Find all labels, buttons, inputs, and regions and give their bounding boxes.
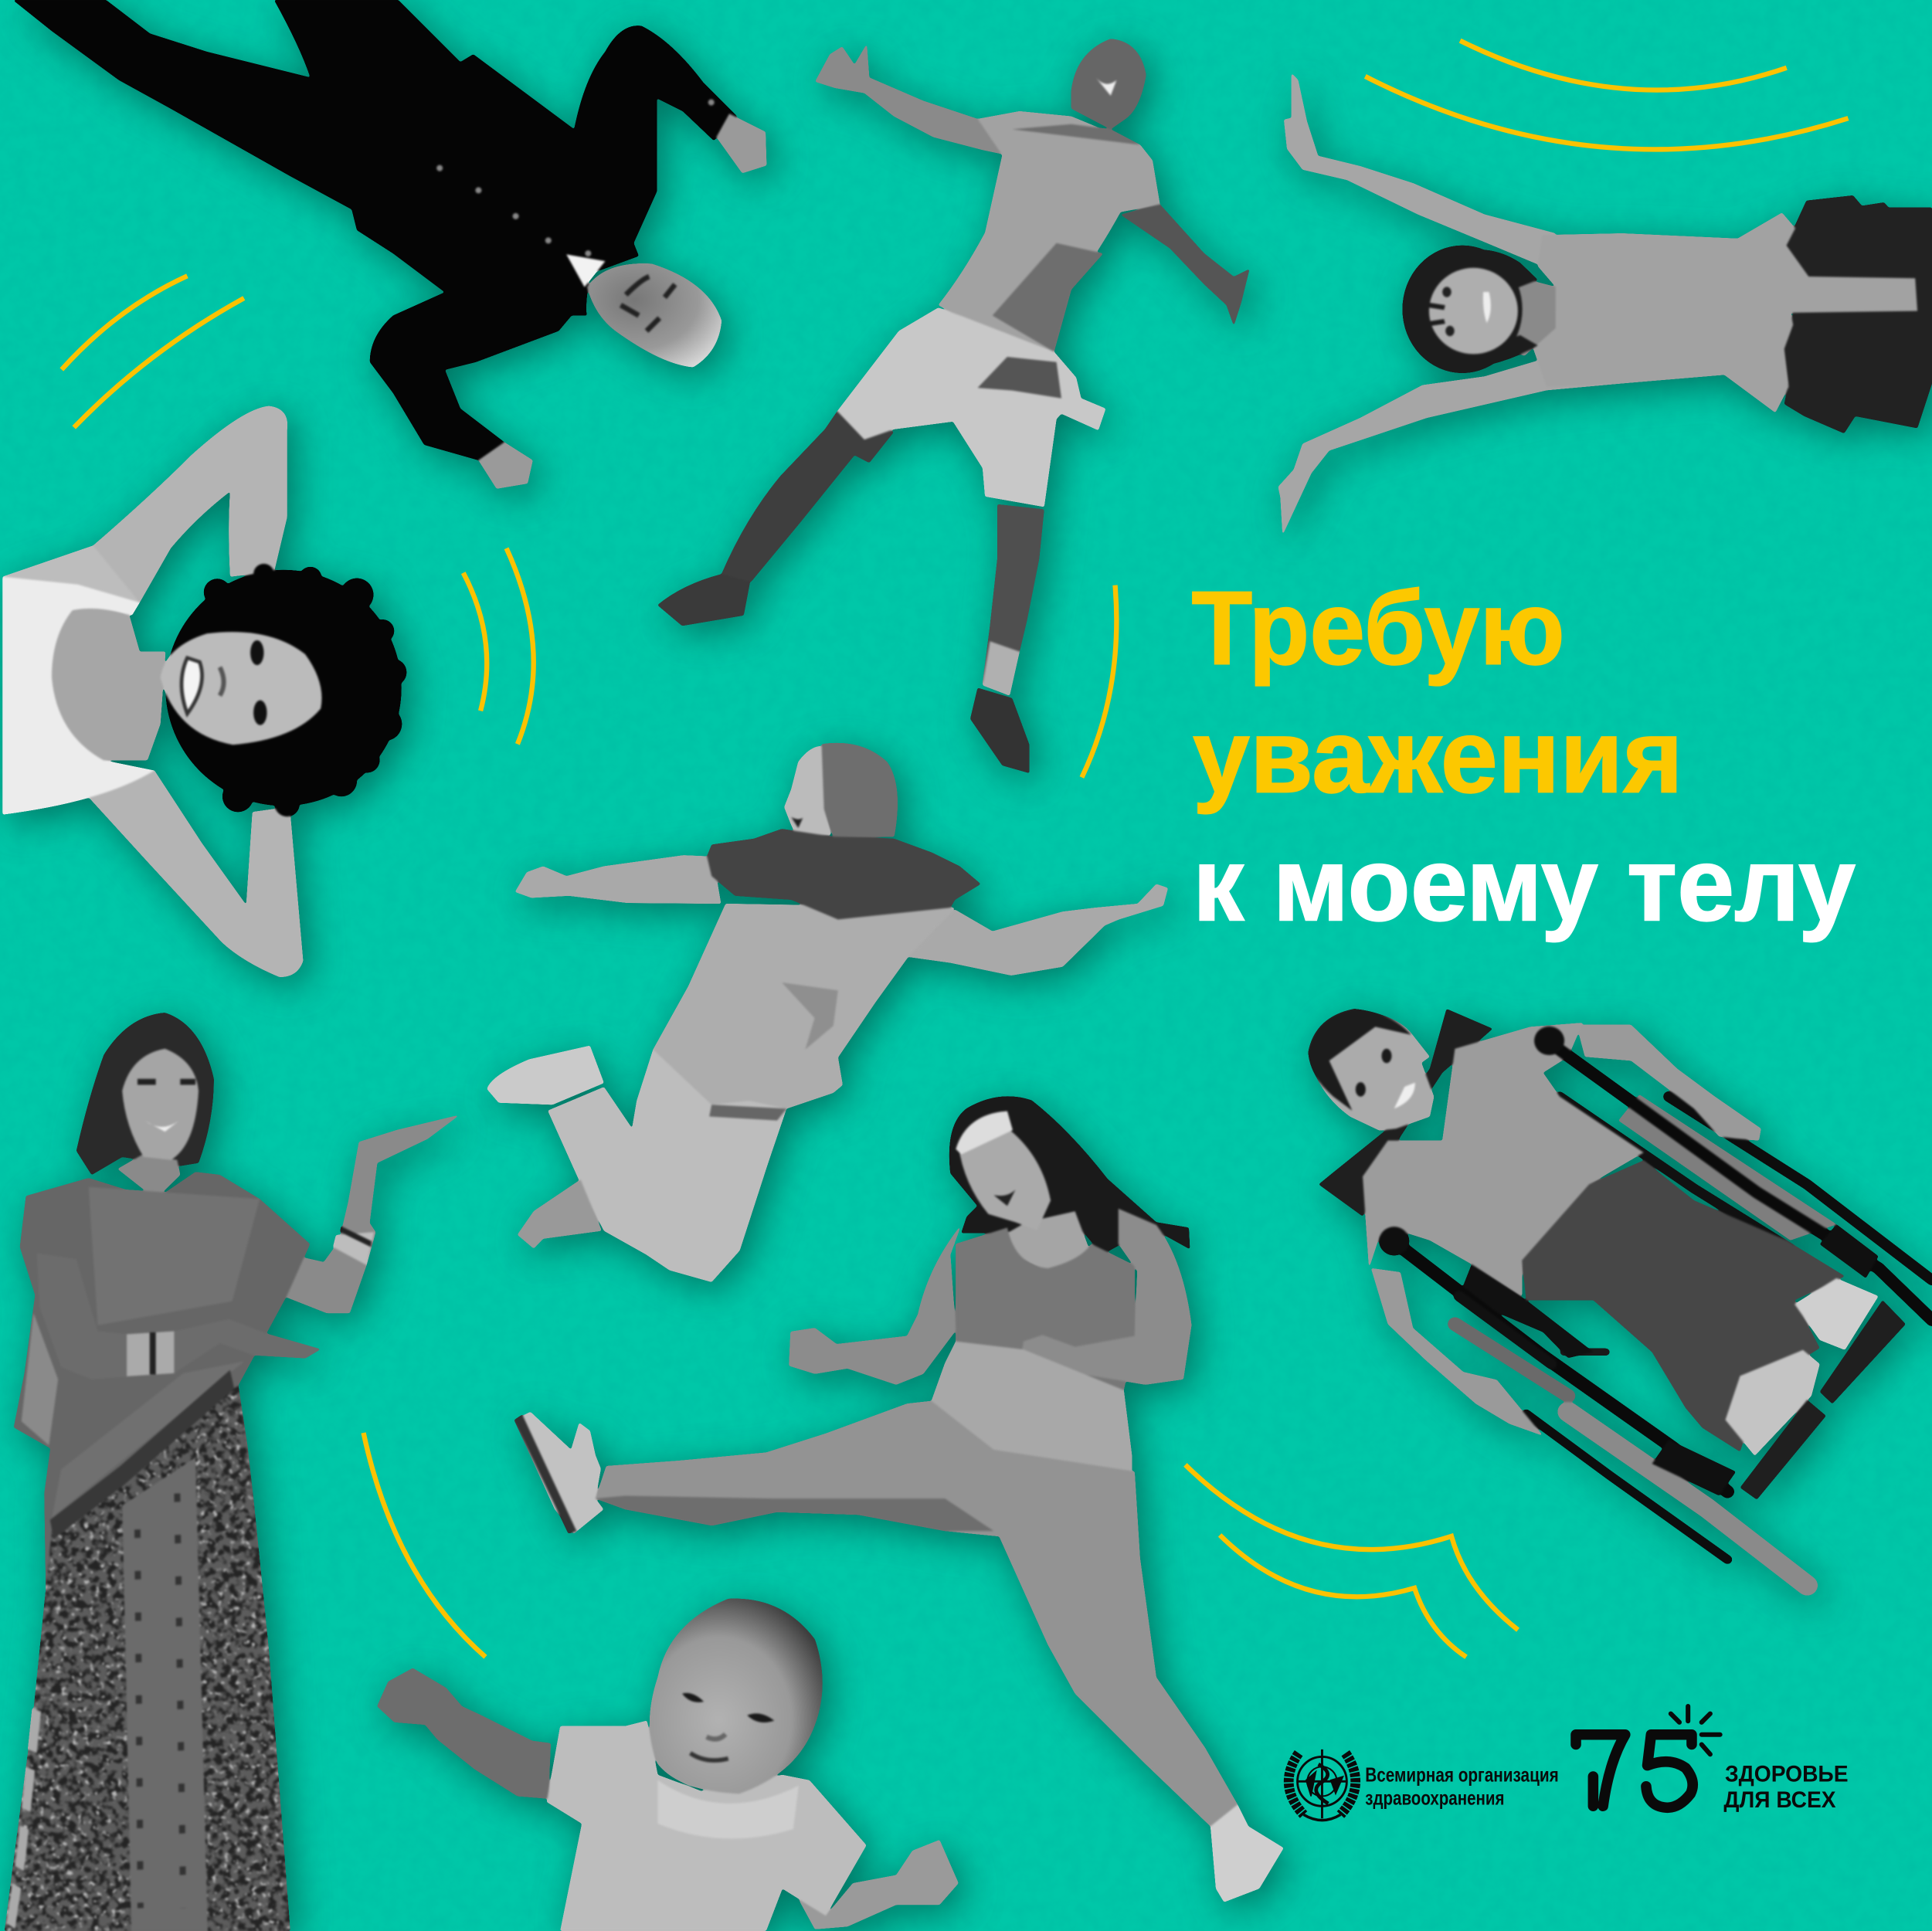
icon: 75 numerals with rays xyxy=(1576,1706,1720,1807)
WHO name text: здравоохранения xyxy=(1365,1788,1505,1810)
person: boy in wheelchair xyxy=(1308,1009,1932,1586)
person: baby xyxy=(377,1599,959,1931)
person: woman in hijab xyxy=(487,743,1168,1282)
person: man in shorts xyxy=(657,39,1250,773)
icon: WHO emblem xyxy=(1289,1749,1356,1821)
title: уважения xyxy=(1193,697,1683,815)
person: girl in dress xyxy=(1278,73,1932,535)
person: man in black suit xyxy=(13,0,766,489)
slogan text: ЗДОРОВЬЕ xyxy=(1725,1761,1849,1787)
decorative yellow motion lines xyxy=(62,41,1849,1657)
title: к моему телу xyxy=(1193,825,1856,942)
title xyxy=(1191,569,1856,942)
WHO name text xyxy=(1365,1764,1559,1810)
person: woman kicking in leggings xyxy=(514,1096,1284,1902)
title: Требую xyxy=(1191,569,1565,687)
slogan text: ДЛЯ ВСЕХ xyxy=(1723,1787,1836,1813)
person: woman in sari xyxy=(0,1013,460,1931)
WHO logo and 75 years mark xyxy=(1289,1706,1849,1821)
WHO name text: Всемирная организация xyxy=(1365,1764,1559,1786)
person: woman in white tank top xyxy=(2,406,406,977)
slogan text xyxy=(1723,1761,1849,1813)
